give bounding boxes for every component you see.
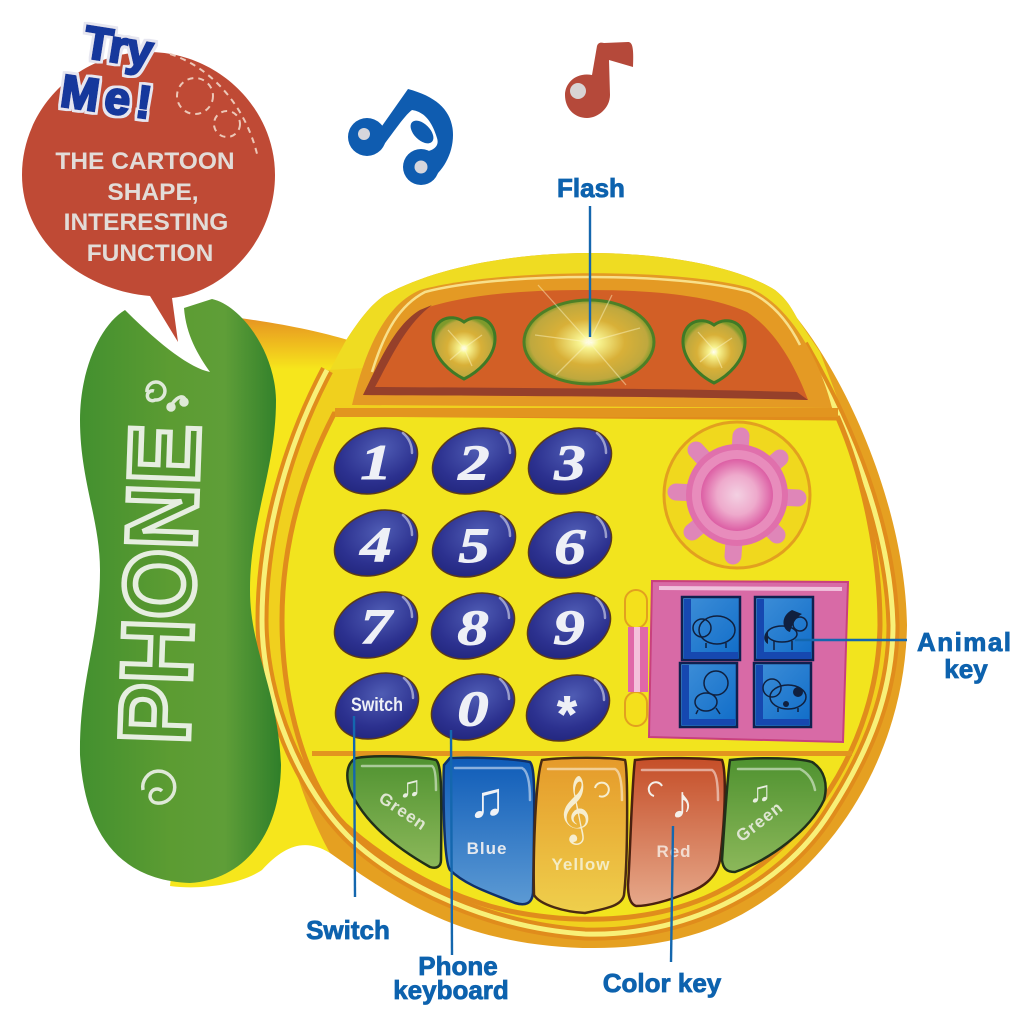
try me badge: Try	[80, 16, 157, 78]
flash rays	[448, 285, 732, 385]
try me badge: Me!	[58, 64, 161, 129]
red key	[628, 758, 725, 906]
callout: phone keyboard: Phone	[418, 951, 498, 981]
bubble text: THE CARTOON	[55, 148, 235, 175]
blue key	[444, 758, 534, 904]
colour piano keys	[347, 756, 826, 913]
left heart light	[433, 318, 495, 379]
number keypad: 2	[457, 436, 490, 490]
outer shell	[270, 253, 907, 948]
callout: animal key	[795, 627, 1011, 684]
yellow key: 𝄞	[557, 776, 591, 845]
number keypad: Switch	[351, 695, 403, 716]
green key left	[347, 756, 441, 868]
red key: Red	[656, 842, 692, 861]
green key right: ♫	[749, 776, 771, 809]
number keypad: 7	[360, 600, 395, 654]
number keypad: 4	[359, 518, 392, 572]
blue key: ♫	[468, 772, 506, 828]
inner yellow panel	[282, 414, 880, 919]
music note red	[565, 42, 633, 118]
dashed flight path	[170, 54, 258, 158]
neck connecting handset	[170, 318, 360, 887]
blue key: Blue	[467, 839, 507, 858]
callout: animal key: Animal	[917, 627, 1011, 657]
yellow key: Yellow	[552, 855, 610, 874]
handset swirls and note	[143, 382, 187, 803]
number keypad: 6	[554, 520, 586, 574]
handset label: PHONE	[98, 422, 222, 746]
bubble text: FUNCTION	[87, 240, 213, 267]
keypad divider	[312, 751, 852, 756]
bubble text: SHAPE,	[107, 179, 199, 206]
key gloss	[403, 433, 606, 700]
bubble text: INTERESTING	[64, 209, 228, 236]
green key right: Green	[732, 798, 787, 846]
green key right	[722, 758, 826, 872]
callout: color key: Color key	[603, 968, 722, 998]
phone body	[170, 253, 907, 948]
callout: flash: Flash	[557, 173, 625, 203]
green key left: Green	[375, 788, 431, 834]
number keypad	[325, 416, 621, 753]
bubble text	[55, 148, 235, 267]
right heart light	[683, 321, 745, 383]
centre flash light	[524, 300, 654, 384]
speech bubble	[22, 16, 275, 342]
number keypad: 0	[457, 682, 489, 736]
number keypad: 5	[458, 519, 490, 573]
callout: animal key: key	[944, 654, 988, 684]
rim lines	[262, 345, 893, 934]
handset	[80, 299, 281, 883]
try me badge	[58, 16, 161, 129]
top display panel	[335, 273, 838, 417]
callout: switch: Switch	[306, 915, 390, 945]
callout: phone keyboard	[393, 730, 509, 1005]
green key left: ♫	[399, 771, 421, 804]
red key: ♪	[670, 776, 694, 828]
callout: phone keyboard: keyboard	[393, 975, 509, 1005]
number keypad: 8	[457, 601, 489, 655]
animal tile: puppy	[680, 663, 737, 727]
number keypad: 1	[360, 436, 392, 490]
number keypad: 3	[553, 436, 586, 490]
animal tile: pony	[755, 597, 813, 660]
animal tile: cow	[754, 663, 811, 727]
animal key door	[625, 581, 848, 742]
number keypad: *	[557, 686, 577, 742]
yellow key	[534, 758, 627, 913]
number keypad: 9	[553, 601, 585, 655]
pink dial	[664, 422, 810, 568]
animal tile: sheep	[682, 597, 740, 660]
music note blue	[348, 89, 453, 185]
